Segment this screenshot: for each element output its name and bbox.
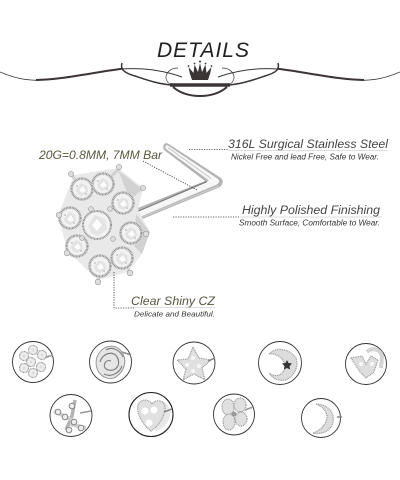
callout: clear CZ: Delicate and Beautiful. <box>134 310 215 318</box>
style: heart <box>129 392 173 436</box>
callout: clear CZ <box>131 296 216 318</box>
callout: polished finishing: Highly Polished Finishing <box>242 205 381 217</box>
style: flower <box>12 342 54 382</box>
callout: polished finishing <box>239 205 382 228</box>
leader lines <box>114 150 239 308</box>
nose stud: flower head with clear CZ stones <box>56 164 150 285</box>
style: butterfly <box>346 344 386 384</box>
style: crescent moon with star <box>258 342 302 384</box>
style: rose <box>90 341 132 383</box>
callout: surgical steel: Nickel Free and lead Free, Safe to Wear. <box>231 152 379 162</box>
nose stud: L-shaped bar <box>128 143 223 222</box>
callout: surgical steel <box>228 139 388 162</box>
callout: bar size: 20G=0.8MM, 7MM Bar <box>38 150 163 162</box>
icon: crown <box>188 60 212 80</box>
callout: clear CZ: Clear Shiny CZ <box>131 296 216 308</box>
style: crescent moon <box>302 398 342 438</box>
callout: surgical steel: 316L Surgical Stainless Steel <box>228 139 388 151</box>
style: dragonfly <box>50 394 92 436</box>
ornamental divider with crown <box>0 63 400 96</box>
style: star <box>173 342 215 384</box>
style: flower with four petals <box>214 394 254 435</box>
callout: polished finishing: Smooth Surface, Comfortable to Wear. <box>239 218 380 228</box>
title: DETAILS <box>157 39 249 62</box>
